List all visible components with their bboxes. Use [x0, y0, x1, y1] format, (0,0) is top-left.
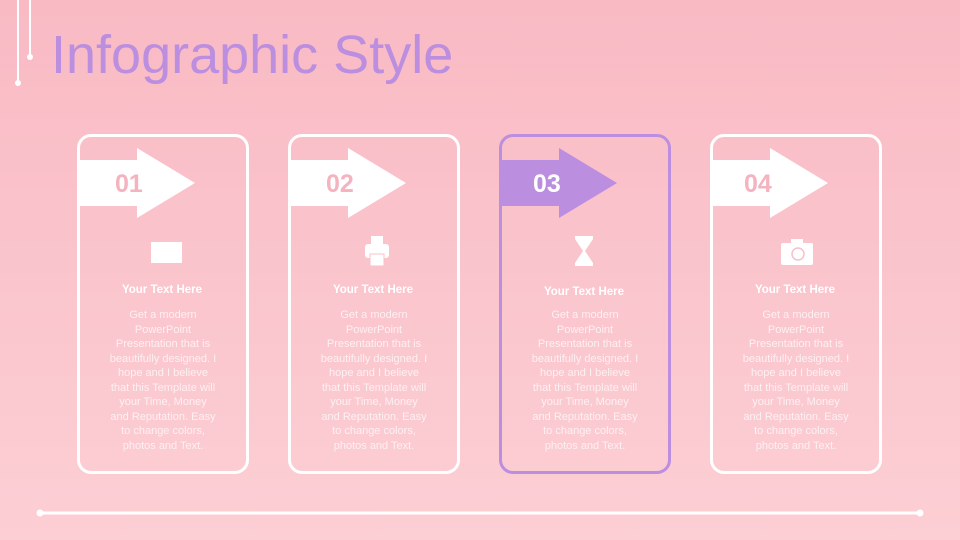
- text: Your Text Here: [122, 284, 202, 296]
- bottom line: [36, 510, 924, 516]
- text: Get a modern: [340, 309, 408, 321]
- text: hope and I believe: [751, 367, 841, 379]
- text: and Reputation. Easy: [321, 410, 427, 422]
- text: Get a modern: [762, 309, 830, 321]
- text: hope and I believe: [329, 367, 419, 379]
- text: 03: [533, 170, 561, 198]
- text: photos and Text.: [756, 440, 836, 452]
- decorative left lines: [15, 0, 33, 86]
- text: PowerPoint: [557, 324, 613, 336]
- text: beautifully designed. I: [743, 352, 849, 364]
- text: Presentation that is: [327, 338, 421, 350]
- text: Your Text Here: [755, 284, 835, 296]
- text: PowerPoint: [135, 324, 191, 336]
- text: your Time, Money: [119, 396, 207, 408]
- text: and Reputation. Easy: [743, 410, 849, 422]
- text: 04: [744, 170, 772, 198]
- text: Your Text Here: [333, 284, 413, 296]
- text: to change colors,: [332, 425, 416, 437]
- panel: 04: [710, 134, 882, 474]
- text: hope and I believe: [118, 367, 208, 379]
- panel: 03: [499, 134, 671, 474]
- text: that this Template will: [533, 382, 637, 394]
- text: Get a modern: [129, 309, 197, 321]
- text: Presentation that is: [538, 338, 632, 350]
- text: to change colors,: [121, 425, 205, 437]
- text: 01: [115, 170, 143, 198]
- text: PowerPoint: [346, 324, 402, 336]
- text: Your Text Here: [544, 286, 624, 298]
- text: that this Template will: [744, 382, 848, 394]
- text: and Reputation. Easy: [110, 410, 216, 422]
- text: your Time, Money: [330, 396, 418, 408]
- text: photos and Text.: [123, 440, 203, 452]
- text: your Time, Money: [541, 396, 629, 408]
- panel: 02: [288, 134, 460, 474]
- text: to change colors,: [754, 425, 838, 437]
- text: beautifully designed. I: [321, 352, 427, 364]
- text: and Reputation. Easy: [532, 410, 638, 422]
- text: beautifully designed. I: [532, 352, 638, 364]
- text: photos and Text.: [334, 440, 414, 452]
- text: Presentation that is: [749, 338, 843, 350]
- text: photos and Text.: [545, 440, 625, 452]
- text: that this Template will: [111, 382, 215, 394]
- text: that this Template will: [322, 382, 426, 394]
- text: your Time, Money: [752, 396, 840, 408]
- text: Get a modern: [551, 309, 619, 321]
- text: hope and I believe: [540, 367, 630, 379]
- text: Presentation that is: [116, 338, 210, 350]
- text: PowerPoint: [768, 324, 824, 336]
- text: 02: [326, 170, 354, 198]
- text: beautifully designed. I: [110, 352, 216, 364]
- title: Infographic Style: [51, 25, 453, 85]
- text: to change colors,: [543, 425, 627, 437]
- panel: 01: [77, 134, 249, 474]
